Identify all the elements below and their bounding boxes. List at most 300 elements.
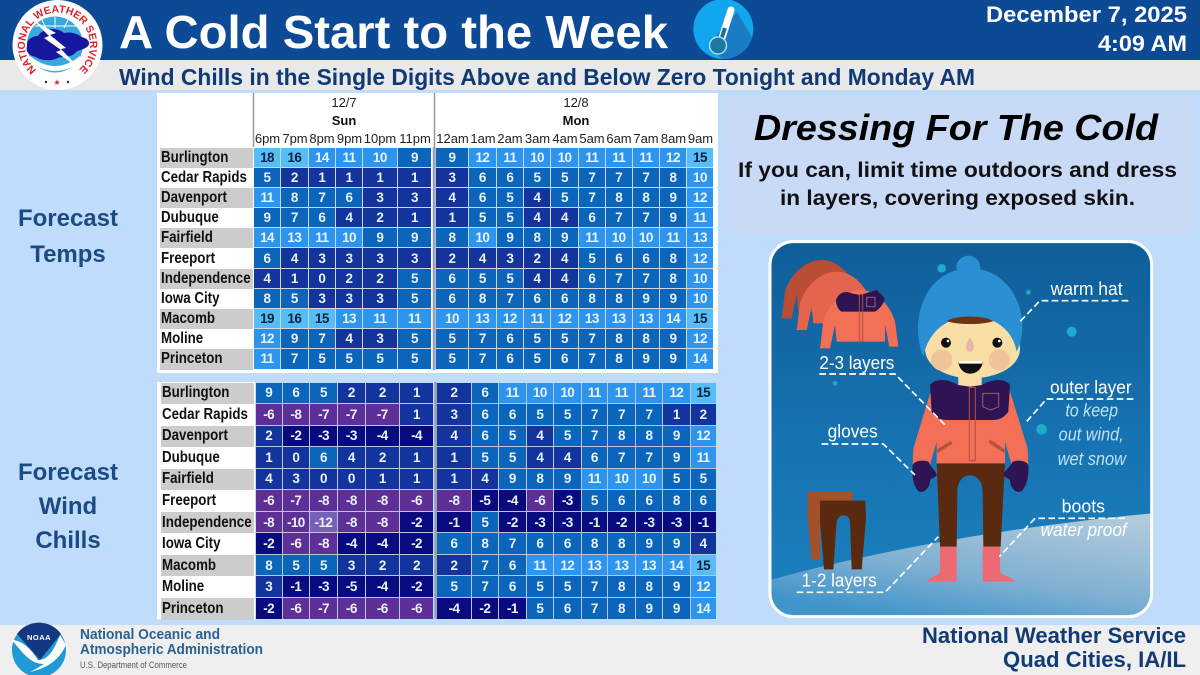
wind chill table: Monday morning: 6 [509,558,516,573]
temps table: Sunday evening: 3 [376,190,383,205]
temps table: Monday morning: 5 [534,170,540,185]
temps table: Sunday evening: 12 [260,331,274,346]
temps table: Sunday evening: 5 [411,331,418,346]
wind chill table: Monday morning: 7 [509,536,516,551]
wind chill table: Monday morning: 6 [481,385,488,400]
wind chill table: Monday morning: 5 [509,450,516,465]
temps table: Sunday evening: 19 [260,311,274,326]
wind chill table: Monday morning: 9 [673,579,680,594]
temps table: Monday morning: 11 [503,150,516,165]
wind chill row labels: Cedar Rapids [162,406,248,423]
wind chill table: Sunday evening: 3 [265,579,272,594]
temps table: Monday morning: 8 [479,291,486,306]
label: outer layer [1025,376,1133,469]
wind chill table: Sunday evening: 6 [320,450,327,465]
temps table: Sunday evening: 10 [342,230,356,245]
icon: NWS logo: ★ [53,78,61,87]
callout panel: dressing for the cold: in layers, covering exposed skin. [780,186,1135,210]
wind chill table: Sunday evening: -6 [263,407,274,422]
wind chill table: Monday morning: 11 [642,385,655,400]
icon: NOAA logo: NOAA [27,633,51,642]
temps table: Sunday evening: 6 [318,210,325,225]
temps table: Monday morning: 5 [506,190,513,205]
temps table: Sunday evening: 1 [411,210,418,225]
wind chill table: Monday morning: 6 [618,493,625,508]
temps table: Sunday evening: 11 [260,190,274,205]
icon: NOAA logo [12,623,66,675]
wind chill table: Monday morning: 8 [618,536,625,551]
wind chill table: Sunday evening: -8 [263,515,274,530]
temps table: Sunday evening: 3 [376,251,383,266]
wind chill row labels: Davenport [162,427,228,444]
wind chill table: Sunday evening: -8 [346,493,357,508]
temps table: Sunday evening: 5 [346,351,352,366]
temps table: Monday morning: 6 [588,271,595,286]
wind chill table: Monday morning: 6 [700,493,707,508]
wind chill table: Monday morning: 5 [536,579,543,594]
wind chill table: Sunday evening: 6 [292,385,299,400]
day and hour column headers: 11pm [399,131,431,146]
wind chill table: Monday morning: 5 [536,407,543,422]
temps table: Sunday evening: 18 [260,150,274,165]
temps table: Sunday evening: 2 [346,271,352,286]
wind chill row labels: Dubuque [162,449,220,466]
temps table: Monday morning: 12 [475,150,489,165]
temps table: Monday morning: 5 [534,351,540,366]
wind chill table: Sunday evening: 9 [265,385,272,400]
wind chill table: Sunday evening: -7 [318,601,329,616]
wind chill table: Monday morning: -3 [644,515,654,530]
temps table: Sunday evening: 13 [287,230,301,245]
temps table: Monday morning: 14 [693,351,707,366]
label: gloves: gloves [828,420,878,441]
wind chill table: Sunday evening: 4 [265,471,272,486]
wind chill table: Monday morning: 5 [564,407,571,422]
wind chill table: Sunday evening: -12 [315,515,332,530]
jacket layers [782,260,898,348]
wind chill table: Monday morning: 8 [618,579,625,594]
day and hour column headers: Sun [332,113,356,128]
wind chill table: Monday morning: 2 [700,407,707,422]
wind chill table: Monday morning: 8 [536,471,543,486]
temps table: Monday morning: 9 [670,351,676,366]
temps table: Monday morning: 5 [506,210,513,225]
temps table: Monday morning: 9 [506,230,513,245]
wind chill table: Monday morning: 8 [481,536,488,551]
wind chill table: Sunday evening: -6 [290,536,301,551]
icon: thermometer [693,0,753,59]
temps table: Sunday evening: 2 [291,170,298,185]
temps table: Sunday evening: 7 [291,351,298,366]
temps table: Monday morning: 10 [475,230,489,245]
wind chill table: Sunday evening: 5 [292,558,299,573]
wind chill table: Monday morning: -1 [589,515,600,530]
wind chill table: Monday morning: 11 [588,471,601,486]
temps table: Monday morning: 8 [642,190,649,205]
wind chill table: Monday morning: 13 [642,558,656,573]
day and hour column headers: 8pm [309,131,335,146]
temps table: Monday morning: 10 [530,150,544,165]
temps table: Monday morning: 4 [534,271,540,286]
wind chill row labels: Macomb [162,557,216,574]
wind chill table: Monday morning: 6 [509,579,516,594]
temps table: Sunday evening: 4 [346,331,352,346]
wind chill table: Monday morning: 9 [673,536,680,551]
wind chill table: Monday morning: 5 [700,471,707,486]
wind chill table: Sunday evening: -6 [346,601,357,616]
temps table: Monday morning: 15 [693,150,707,165]
label: boots: water proof [1041,520,1129,540]
wind chill table: Sunday evening: 4 [348,450,355,465]
temps table: Monday morning: 4 [479,251,486,266]
wind chill table: Sunday evening: 0 [292,450,299,465]
temps row labels: Iowa City [161,290,220,307]
label: warm hat [1018,278,1128,323]
wind chill table: Monday morning: 7 [618,407,625,422]
wind chill table: Monday morning: 5 [564,579,571,594]
temps table: Monday morning: 9 [670,190,676,205]
temps table: Monday morning: 4 [534,190,540,205]
wind chill row labels: Princeton [162,600,223,617]
wind chill table: Sunday evening: -4 [377,428,388,443]
wind chill table: Sunday evening: -6 [411,601,422,616]
wind chill table: Sunday evening: 2 [413,558,420,573]
temps table: Monday morning: 15 [693,311,707,326]
temps row labels: Moline [161,330,203,347]
wind chill table: Monday morning: 9 [673,450,680,465]
date and time: December 7, 2025 [986,2,1187,27]
heading: Forecast Temps: Forecast [18,205,118,232]
day and hour column headers: 6am [606,131,632,146]
temps table: Sunday evening: 1 [411,170,418,185]
temps table: Sunday evening: 1 [346,170,352,185]
temps table: Monday morning: 13 [639,311,653,326]
wind chill table: Sunday evening: -3 [318,428,329,443]
day and hour column headers: 8am [661,131,686,146]
temps table: Monday morning: 11 [585,150,598,165]
label: outer layer: wet snow [1058,449,1127,469]
temps table: Sunday evening: 1 [318,170,325,185]
NOAA name text: U.S. Department of Commerce [80,660,187,670]
temps table: Monday morning: 9 [670,210,676,225]
temps table: Sunday evening: 16 [287,150,301,165]
wind chill table: Sunday evening: -8 [346,515,357,530]
wind chill table: Monday morning: 1 [451,450,457,465]
wind chill table: Monday morning: 10 [533,385,547,400]
label: 1-2 layers: 1-2 layers [802,570,877,591]
temps table: Monday morning: 6 [615,251,622,266]
label: gloves [822,420,915,475]
wind chill table: Monday morning: 9 [673,601,680,616]
temps table: Monday morning: 7 [615,271,622,286]
wind chill table: Monday morning: 13 [615,558,628,573]
wind chill table: Sunday evening: -6 [290,601,301,616]
wind chill table: Monday morning: 8 [673,493,680,508]
temps table: Sunday evening: 5 [318,351,325,366]
temps table: Monday morning: 11 [585,230,598,245]
wind chill table: Sunday evening: 0 [348,471,355,486]
wind chill table: Monday morning: 4 [481,471,488,486]
wind chill table: Sunday evening: 1 [413,450,420,465]
wind chill table: Monday morning: 14 [696,601,710,616]
wind chill table: Monday morning: 7 [618,450,625,465]
wind chill table: Monday morning: 12 [696,428,710,443]
day and hour column headers: 12am [436,131,469,146]
wind chill table: Monday morning: 7 [591,428,598,443]
wind chill table: Sunday evening: 1 [413,385,420,400]
day and hour column headers: 9pm [337,131,362,146]
wind chill table: Sunday evening: -4 [377,579,388,594]
temps table: Sunday evening: 4 [264,271,270,286]
temps table: Monday morning: 13 [612,311,626,326]
temps table: Monday morning: 1 [449,210,455,225]
temps table: Sunday evening: 7 [318,331,325,346]
wind chill table: Sunday evening: 2 [379,450,386,465]
wind chill table: Monday morning: 7 [645,407,652,422]
callout panel: dressing for the cold: Dressing For The Cold [754,107,1159,148]
temps table: Monday morning: 9 [642,351,649,366]
temps row labels: Davenport [161,189,227,206]
temps table: Monday morning: 7 [479,331,486,346]
temps table: Monday morning: 5 [561,331,568,346]
label: 1-2 layers [797,537,938,592]
temps table: Monday morning: 10 [445,311,459,326]
day and hour column headers: 7pm [282,131,308,146]
temps table: Sunday evening: 3 [376,331,383,346]
wind chill table: Monday morning: 6 [509,407,516,422]
wind chill table: Monday morning: -2 [479,601,490,616]
wind chill table: Monday morning: 6 [564,601,571,616]
temps table: Sunday evening: 9 [291,331,298,346]
heading: Forecast Wind Chills [18,459,118,554]
temps table: Monday morning: 4 [561,271,568,286]
subtitle band [0,60,1200,90]
temps table: Monday morning: 5 [561,190,568,205]
wind chill table: Monday morning: -4 [449,601,459,616]
temps table: Monday morning: 5 [588,251,595,266]
wind chill table: Monday morning: 1 [451,471,457,486]
icon: NWS logo: NATIONAL WEATHER SERVICE [18,5,98,75]
temps table: Sunday evening: 3 [411,190,418,205]
wind chill table: Monday morning: -3 [562,493,573,508]
temps table: Monday morning: 9 [670,331,676,346]
temps table: Monday morning: 9 [642,291,649,306]
callout panel: dressing for the cold [722,97,1192,235]
temps table: Sunday evening: 9 [411,230,418,245]
temps table panel [157,93,718,373]
day and hour column headers: 2am [497,131,523,146]
temps table: Monday morning: 7 [588,170,595,185]
temps table: Sunday evening: 3 [346,291,352,306]
wind chill table: Sunday evening: -3 [346,428,357,443]
label: outer layer: to keep [1065,401,1118,421]
wind chill table: Sunday evening: 3 [292,471,299,486]
wind chill table: Monday morning: 5 [536,601,543,616]
day and hour column headers: 7am [633,131,659,146]
temps row labels [160,148,253,370]
wind chill table: Monday morning: 5 [451,579,457,594]
temps table: Monday morning: 12 [666,150,680,165]
wind chill table: Sunday evening: 1 [379,471,386,486]
temps table: Sunday evening: 8 [291,190,298,205]
wind chill table: Sunday evening: -5 [346,579,357,594]
temps table: Monday morning: 13 [693,230,707,245]
temps table: Sunday evening: 4 [346,210,352,225]
label: 2-3 layers: 2-3 layers [819,352,894,373]
wind chill table: Monday morning: 11 [615,385,628,400]
wind chill table: Monday morning: 4 [536,450,543,465]
wind chill label strip [157,382,255,620]
wind chill table: Monday morning: 11 [697,450,710,465]
temps table: Monday morning: 10 [612,230,626,245]
NOAA name text: National Oceanic and [80,627,220,643]
temps table: Monday morning: 2 [449,251,455,266]
NOAA name text: Atmospheric Administration [80,642,263,658]
temps table: Monday morning: 14 [666,311,680,326]
temps table: Monday morning: 8 [670,251,676,266]
temps table: Monday morning: 5 [534,331,540,346]
wind chill table: Sunday evening: 3 [348,558,355,573]
temps table: Monday morning: 12 [503,311,517,326]
wind chill table: Monday morning: 8 [591,536,598,551]
wind chill table: Monday morning: 11 [506,385,519,400]
temps table: Monday morning: 10 [693,170,707,185]
temps table: Monday morning: 7 [642,271,649,286]
wind chill table: Monday morning: 6 [564,536,571,551]
wind chill table: Sunday evening: -8 [290,407,301,422]
wind chill table: Sunday evening: 1 [413,407,420,422]
wind chill table: Sunday evening: -7 [377,407,388,422]
wind chill table: Sunday evening: 1 [265,450,272,465]
wind chill row labels: Fairfield [162,470,214,487]
wind chill table: Monday morning: -5 [479,493,490,508]
wind chill table: Monday morning: 3 [451,407,457,422]
wind chill table: Sunday evening: -8 [318,536,329,551]
wind chill table: Monday morning: 11 [588,385,601,400]
wind chill table: Monday morning: -2 [616,515,627,530]
wind chill table: Sunday evening: -7 [346,407,357,422]
temps table: Monday morning: 7 [479,351,486,366]
wind chill table: Monday morning: 5 [564,428,571,443]
wind chill table: Monday morning: 8 [645,428,652,443]
temps table: Monday morning: 7 [588,190,595,205]
wind chill table: Monday morning: 6 [645,493,652,508]
temps table: Monday morning: 5 [561,170,568,185]
temps table: Sunday evening: 0 [318,271,325,286]
day and hour column headers [254,93,713,147]
label: outer layer: out wind, [1059,425,1124,445]
heading: Forecast Temps: Temps [30,241,106,268]
pants layers [808,492,866,569]
temps table: Sunday evening: 2 [376,210,383,225]
table column separators [434,147,436,619]
wind chill table: Monday morning: 5 [481,515,488,530]
temps table: Sunday evening: 3 [318,251,325,266]
temps table: Monday morning: 7 [615,210,622,225]
temps table: Sunday evening: 11 [260,351,274,366]
temps table: Sunday evening: 4 [291,251,298,266]
wind chill table: Monday morning: -2 [507,515,518,530]
temps table: Monday morning [436,148,713,369]
temps table: Monday morning: 5 [506,271,513,286]
temps table: Sunday evening: 13 [342,311,356,326]
wind chill table: Monday morning: 14 [669,558,683,573]
temps table: Monday morning: 6 [588,210,595,225]
temps table: Monday morning: 7 [506,291,513,306]
temps table: Monday morning: 10 [639,230,653,245]
wind chill row labels: Burlington [162,384,229,401]
wind chill table: Monday morning: 11 [533,558,546,573]
temps table: Sunday evening: 11 [342,150,356,165]
wind chill table: Monday morning: 8 [645,579,652,594]
temps table: Monday morning: 6 [479,170,486,185]
temps table: Monday morning: 6 [506,351,513,366]
date and time [986,2,1187,56]
temps row labels: Independence [161,270,251,287]
wind chill table: Sunday evening: 8 [265,558,272,573]
temps table: Monday morning: 4 [534,210,540,225]
temps table: Sunday evening: 10 [373,150,387,165]
callout panel: dressing for the cold: If you can, limit time outdoors and dress [738,158,1177,182]
temps table: Monday morning: 9 [561,230,568,245]
temps table: Monday morning: 7 [588,351,595,366]
temps table: Monday morning: 6 [506,170,513,185]
day and hour column headers: Mon [563,113,589,128]
wind chill row labels: Moline [162,578,204,595]
wind chill table: Monday morning: -3 [562,515,573,530]
day and hour column headers: 4am [552,131,578,146]
header bar [0,0,1200,60]
temps table: Monday morning: 8 [670,170,676,185]
wind chill table: Sunday evening: -3 [318,579,329,594]
temps table: Sunday evening: 9 [411,150,418,165]
temps row labels: Fairfield [161,229,213,246]
temps table: Sunday evening: 3 [376,291,383,306]
temps table: Sunday evening: 5 [264,170,270,185]
temps table: Monday morning: 5 [449,351,455,366]
temps table: Sunday evening: 5 [291,291,298,306]
card background [770,242,1152,617]
temps table: Monday morning: 6 [642,251,649,266]
footer band [0,625,1200,675]
temps table: Monday morning: 9 [670,291,676,306]
wind chill table: Sunday evening: -2 [411,536,422,551]
temps table: Sunday evening: 5 [411,351,418,366]
temps table: Monday morning: 8 [615,331,622,346]
subtitle: Wind Chills in the Single Digits Above and Below Zero Tonight and Monday AM [119,64,975,90]
temps table: Sunday evening: 14 [260,230,274,245]
temps table: Sunday evening: 11 [315,230,328,245]
wind chill table: Sunday evening: -4 [377,536,388,551]
wind chill table: Monday morning: 7 [645,450,652,465]
wind chill table: Sunday evening: -6 [263,493,274,508]
temps table: Monday morning: 7 [615,170,622,185]
wind chill table: Monday morning: 15 [696,558,710,573]
day and hour column headers: 3am [525,131,550,146]
wind chill table: Monday morning [437,382,716,619]
temps table: Monday morning: 11 [612,150,625,165]
wind chill table: Monday morning: 5 [481,450,488,465]
temps table: Monday morning: 13 [475,311,489,326]
wind chill table: Monday morning: 7 [481,579,488,594]
day and hour column headers: 10pm [364,131,396,146]
wind chill table: Monday morning: 9 [645,601,652,616]
temps table: Monday morning: 4 [561,210,568,225]
temps table: Monday morning: 5 [449,331,455,346]
temps table: Sunday evening: 3 [411,251,418,266]
temps row labels: Macomb [161,310,215,327]
wind chill table: Monday morning: 8 [618,601,625,616]
